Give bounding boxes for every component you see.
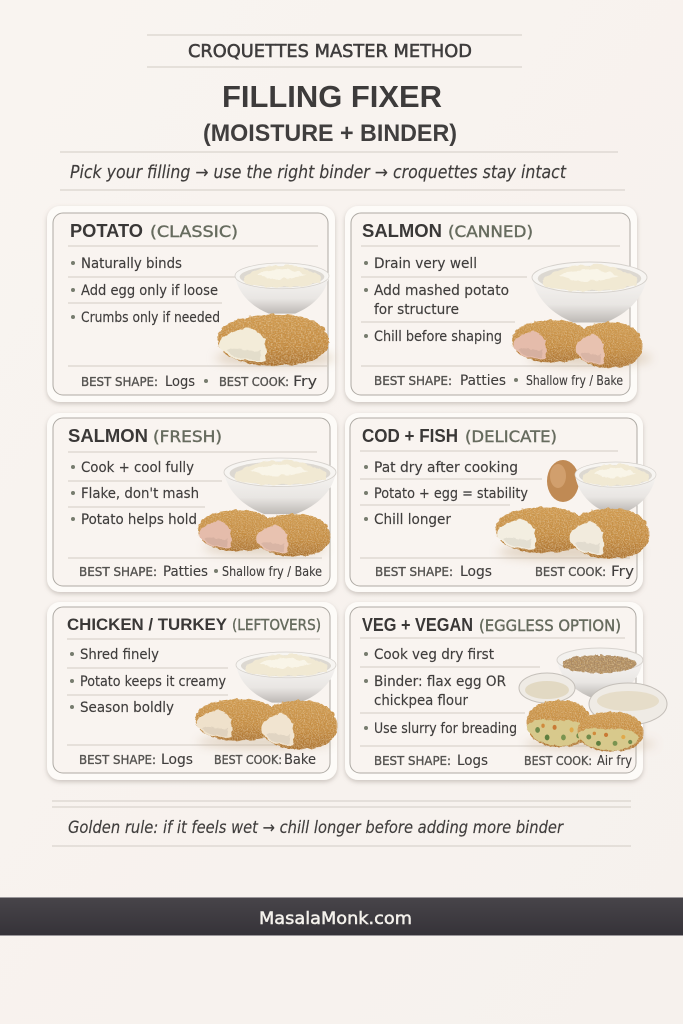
heading — [67, 615, 321, 634]
heading: SALMON — [68, 426, 148, 446]
footer: best shape and cook: Logs — [457, 753, 488, 769]
heading: (CANNED) — [448, 222, 533, 241]
heading: CHICKEN / TURKEY — [67, 615, 228, 634]
footer: best shape and cook — [79, 752, 316, 768]
heading: (FRESH) — [153, 427, 222, 446]
footer: best shape and cook: Fry — [293, 374, 317, 390]
bullet list: Potato + egg = stability — [374, 486, 528, 502]
bullet list: Drain very well — [374, 256, 477, 272]
icon: rice bowl and salmon croquettes — [198, 458, 336, 556]
footer: best shape and cook: BEST SHAPE: — [374, 754, 451, 768]
bullet list: Pat dry after cooking — [374, 460, 518, 476]
bullet list — [364, 256, 509, 345]
heading — [362, 615, 621, 635]
footer: best shape and cook — [375, 564, 634, 580]
footer: best shape and cook: BEST SHAPE: — [375, 565, 453, 579]
icon: egg, mash bowl and fish croquettes — [496, 460, 656, 560]
footer: best shape and cook: BEST SHAPE: — [79, 565, 157, 579]
bullet list — [70, 647, 226, 716]
footer band: website: MasalaMonk.com — [259, 909, 412, 929]
heading — [68, 426, 222, 446]
main title: FILLING FIXER — [222, 79, 442, 114]
bullet list: Crumbs only if needed — [81, 310, 220, 326]
footer band: website — [0, 897, 683, 936]
footer: best shape and cook: BEST SHAPE: — [79, 753, 156, 767]
footer: best shape and cook — [79, 564, 322, 580]
bullet list — [71, 256, 220, 326]
bullet list: Potato helps hold — [81, 512, 197, 528]
heading — [362, 426, 557, 446]
bullet list — [364, 647, 517, 737]
footer: best shape and cook: Logs — [165, 374, 195, 390]
bullet list: Add egg only if loose — [81, 283, 218, 299]
footer: best shape and cook: Patties — [460, 373, 506, 389]
footer: best shape and cook: Logs — [460, 564, 492, 580]
panel: cod and fish delicate — [345, 413, 656, 592]
footer: best shape and cook: BEST SHAPE: — [374, 374, 452, 388]
footer: best shape and cook: Fry — [611, 564, 634, 580]
icon: mash bowl and chicken croquettes — [195, 652, 337, 749]
footer: best shape and cook: Air fry — [597, 754, 632, 769]
bullet list: Chill before shaping — [374, 329, 502, 345]
heading: (EGGLESS OPTION) — [479, 616, 621, 635]
heading: VEG + VEGAN — [362, 615, 473, 635]
bullet list: Use slurry for breading — [374, 721, 517, 737]
footer: best shape and cook: Bake — [284, 752, 316, 768]
icon: mash bowl and salmon croquettes — [512, 262, 652, 368]
footer: best shape and cook — [374, 753, 632, 769]
footer: best shape and cook: Shallow fry / Bake — [526, 374, 623, 389]
heading — [70, 221, 238, 241]
heading: (LEFTOVERS) — [232, 616, 321, 634]
footer: best shape and cook: BEST COOK: — [219, 375, 289, 389]
bullet list: Binder: flax egg OR — [374, 674, 506, 690]
heading: SALMON — [362, 221, 442, 241]
bullet list: Potato keeps it creamy — [80, 674, 226, 690]
subtitle: (MOISTURE + BINDER) — [203, 120, 457, 147]
footer: best shape and cook: Shallow fry / Bake — [222, 565, 322, 580]
footer: best shape and cook: Patties — [163, 564, 208, 580]
footer: best shape and cook — [81, 374, 317, 390]
bullet list: Add mashed potato — [374, 283, 509, 299]
bullet list: Chill longer — [374, 512, 451, 528]
footer: best shape and cook — [374, 373, 623, 389]
callout: golden rule: Golden rule: if it feels wet → chill longer before adding more binder — [68, 818, 564, 837]
bullet list: Season boldly — [80, 700, 174, 716]
bullet list: Naturally binds — [81, 256, 182, 272]
heading: (DELICATE) — [465, 427, 557, 446]
bullet list: Cook + cool fully — [81, 460, 194, 476]
icon: flax bowl, flour dishes and veg croquettes — [519, 648, 667, 751]
footer: best shape and cook: Logs — [161, 752, 193, 768]
icon: mash bowl and potato croquette — [215, 263, 335, 366]
bullet list: for structure — [374, 302, 459, 318]
heading: POTATO — [70, 221, 143, 241]
footer: best shape and cook: BEST COOK: — [214, 753, 282, 767]
heading — [362, 221, 533, 241]
footer: best shape and cook: BEST COOK: — [535, 565, 606, 579]
bullet list — [71, 460, 199, 528]
panel: chicken and turkey leftovers — [47, 602, 337, 780]
panel: veg and vegan eggless — [345, 602, 667, 780]
tagline: Pick your filling → use the right binder → croquettes stay intact — [70, 163, 567, 183]
panel: potato classic — [47, 206, 335, 402]
heading: COD + FISH — [362, 426, 458, 446]
bullet list: Cook veg dry first — [374, 647, 494, 663]
panel: salmon fresh — [47, 413, 337, 592]
bullet list: chickpea flour — [374, 693, 468, 709]
bullet list: Shred finely — [80, 647, 159, 663]
bullet list: Flake, don't mash — [81, 486, 199, 502]
bullet list — [364, 460, 528, 528]
kicker: method name: CROQUETTES MASTER METHOD — [188, 41, 472, 62]
footer: best shape and cook: BEST COOK: — [524, 754, 592, 768]
panel: salmon canned — [345, 206, 652, 402]
footer: best shape and cook: BEST SHAPE: — [81, 375, 158, 389]
heading: (CLASSIC) — [150, 222, 238, 241]
